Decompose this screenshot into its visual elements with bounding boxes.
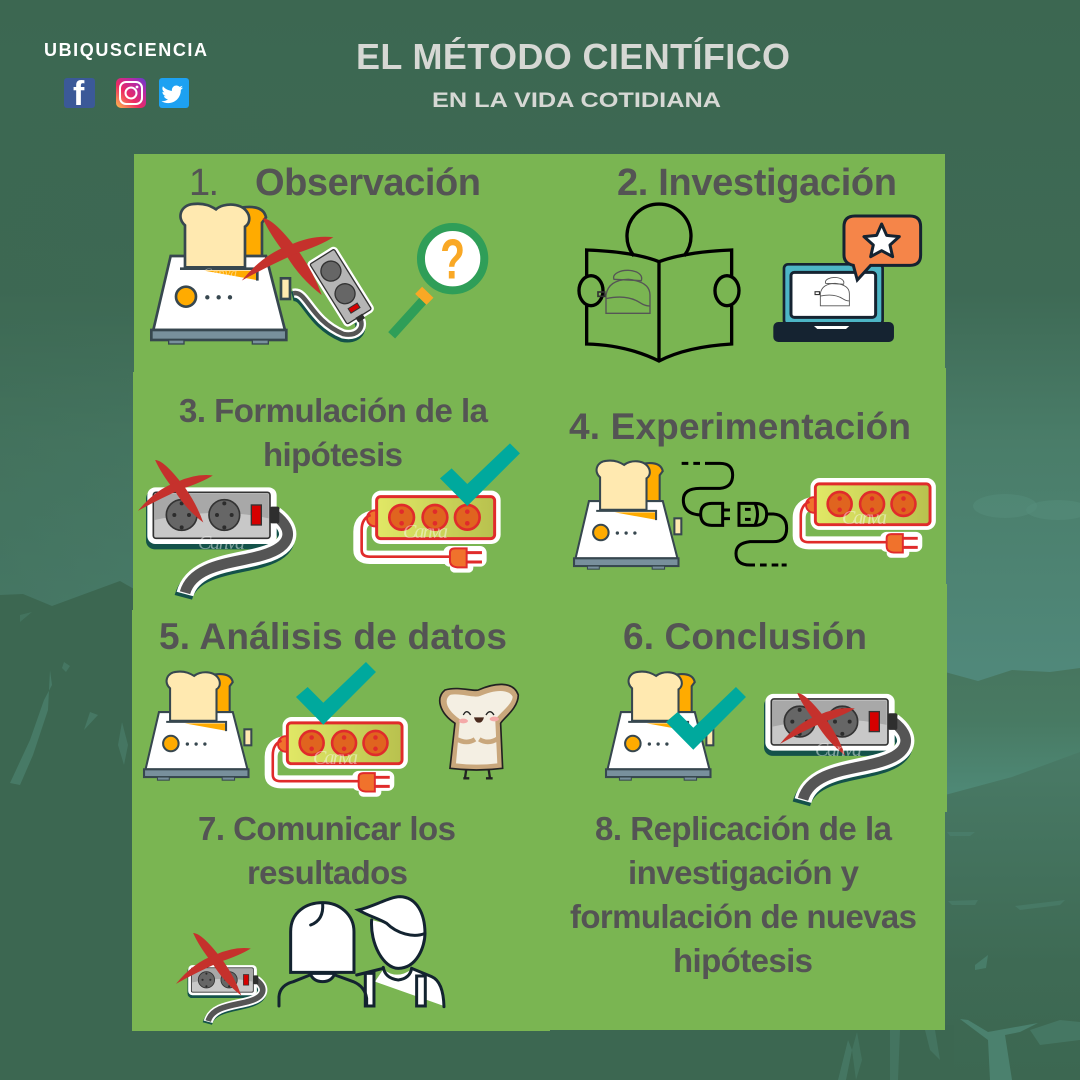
icon: red power strip [271,717,408,797]
heading: step 8: 8. Replicación de la [595,810,893,847]
heading: step 2: 2. Investigación [617,162,897,204]
icon: two people [279,897,444,1007]
icon: teal check [440,443,520,506]
heading: step 8 [570,810,917,979]
icon: facebook: f [73,75,85,113]
icon: plug and socket cable [682,463,787,565]
heading: step 1: 1. [189,162,219,204]
icon: magnifying glass with question mark [392,227,484,335]
heading: step 3: hipótesis [263,436,403,473]
icon: person reading book [579,204,739,361]
icon: red x [176,933,251,996]
watermark: Canva [203,265,237,280]
heading: step 1: Observación [255,162,481,204]
panel: step 4 experimentación [545,368,946,584]
watermark: Canva [313,747,358,769]
panel: step 3 formulación de la hipótesis [133,372,545,610]
icon: laptop with star bubble [773,216,921,342]
icon: instagram [116,78,146,108]
heading: step 3 [179,392,489,473]
icon: toaster [574,461,681,569]
icon: teal check [666,687,746,750]
brand name: UBIQUSCIENCIA [44,40,207,60]
icon: gray power strip rotated [292,245,376,337]
heading: step 7 [198,810,456,891]
icon: magnifying glass with question mark: ? [440,228,465,291]
icon: red x over toaster and strip [242,218,333,295]
panel: step 1 observación [134,154,545,374]
heading: step 6: 6. Conclusión [623,616,867,657]
title: EL MÉTODO CIENTÍFICO [356,36,790,77]
icon: twitter [159,78,189,108]
subtitle: EN LA VIDA COTIDIANA [432,89,721,112]
heading: step 4: 4. Experimentación [569,406,911,447]
watermark: Canva [198,532,245,554]
icon: toaster [151,204,290,344]
icon: red x [138,460,213,523]
icon: red power strip [799,478,936,558]
icon: facebook [64,75,95,113]
panel: step 2 investigación [545,154,945,370]
icon: toaster [606,672,713,780]
panel: step 8 replicación [550,810,945,1030]
watermark: Canva [403,521,448,543]
heading: step 5: 5. Análisis de datos [159,616,507,657]
icon: toaster [144,672,251,780]
panel: step 5 análisis de datos [132,610,545,810]
watermark: Canva [842,507,887,529]
panel: step 7 comunicar los resultados [132,808,550,1031]
heading: step 7: 7. Comunicar los [198,810,456,847]
icon: gray power strip [146,487,288,597]
icon: small gray power strip [187,965,263,1024]
icon: teal check [296,662,376,725]
icon: happy toast character [440,684,518,778]
icon: gray power strip [764,694,906,804]
heading: step 8: formulación de nuevas [570,898,917,935]
heading: step 8: investigación y [628,854,860,891]
watermark: Canva [815,739,862,761]
icon: red power strip [360,491,501,573]
heading: step 8: hipótesis [673,942,813,979]
heading: step 3: 3. Formulación de la [179,392,489,429]
panel: step 6 conclusión [545,584,947,812]
heading: step 7: resultados [247,854,408,891]
icon: red x [780,693,855,756]
